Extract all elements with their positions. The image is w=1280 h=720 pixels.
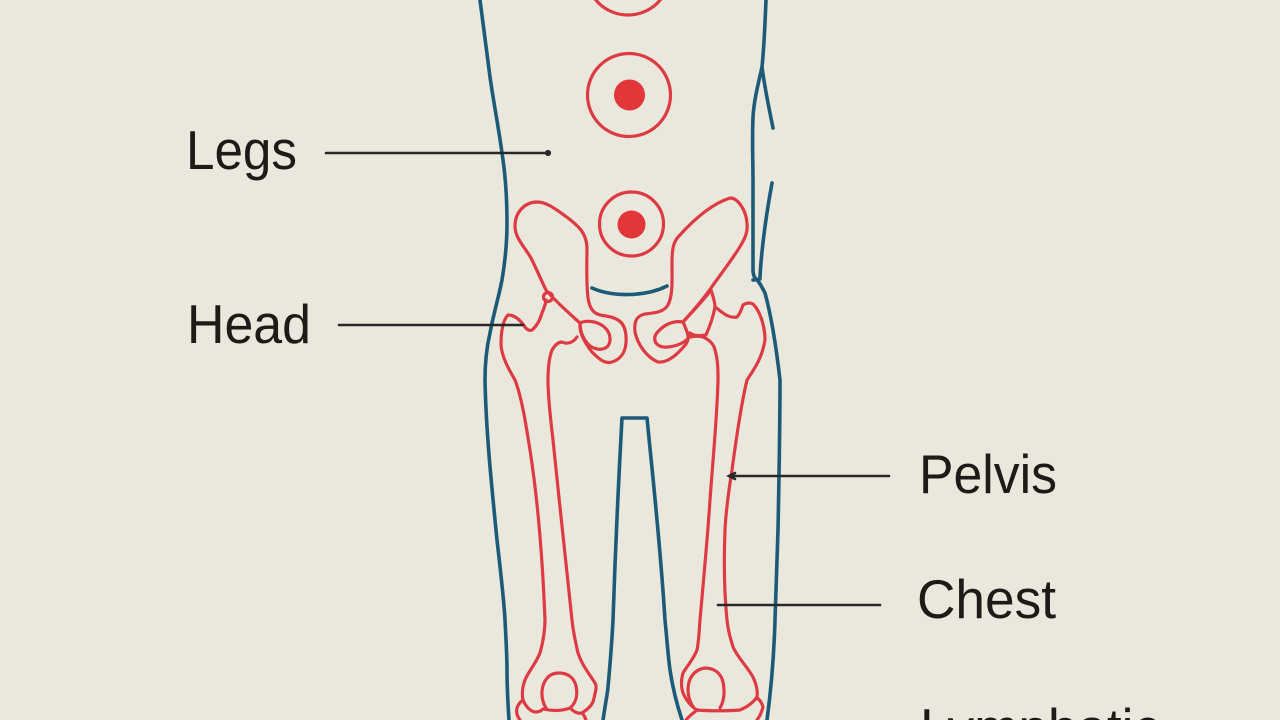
right knee condyle <box>688 668 724 708</box>
markers <box>586 0 670 256</box>
label text: Head <box>187 293 311 355</box>
right torso branch <box>762 67 773 128</box>
left pelvis inner loop <box>580 321 610 349</box>
right femur <box>682 303 765 711</box>
leader line <box>729 473 889 479</box>
label text: Chest <box>917 568 1056 630</box>
label: Pelvis <box>729 443 1057 505</box>
right pelvis inner loop <box>655 322 690 347</box>
right hip branch <box>760 183 772 277</box>
inner legs <box>603 418 682 720</box>
leader line <box>339 324 523 326</box>
leader line <box>718 604 880 606</box>
right body contour <box>753 0 780 720</box>
lower marker dot <box>618 210 646 238</box>
top marker ring <box>586 0 670 15</box>
lower marker ring <box>600 192 664 256</box>
left body contour <box>480 0 509 720</box>
left knee condyle <box>542 673 577 708</box>
label text: Pelvis <box>919 443 1057 505</box>
label text: Legs <box>186 119 297 181</box>
right lower bone <box>686 698 763 720</box>
left pelvis <box>515 202 626 363</box>
left femur <box>501 300 596 713</box>
pelvis and leg bones <box>501 198 765 720</box>
right hip triangle <box>683 290 715 336</box>
body outline <box>480 0 780 720</box>
hip tick <box>753 279 760 280</box>
left lower bone <box>517 700 586 720</box>
left hip joint <box>544 292 552 302</box>
label: Legs <box>186 119 550 181</box>
middle marker dot <box>614 80 645 110</box>
right pelvis <box>635 198 747 362</box>
leader line <box>326 151 550 155</box>
pelvic floor arc <box>592 286 667 295</box>
middle marker ring <box>588 54 670 136</box>
